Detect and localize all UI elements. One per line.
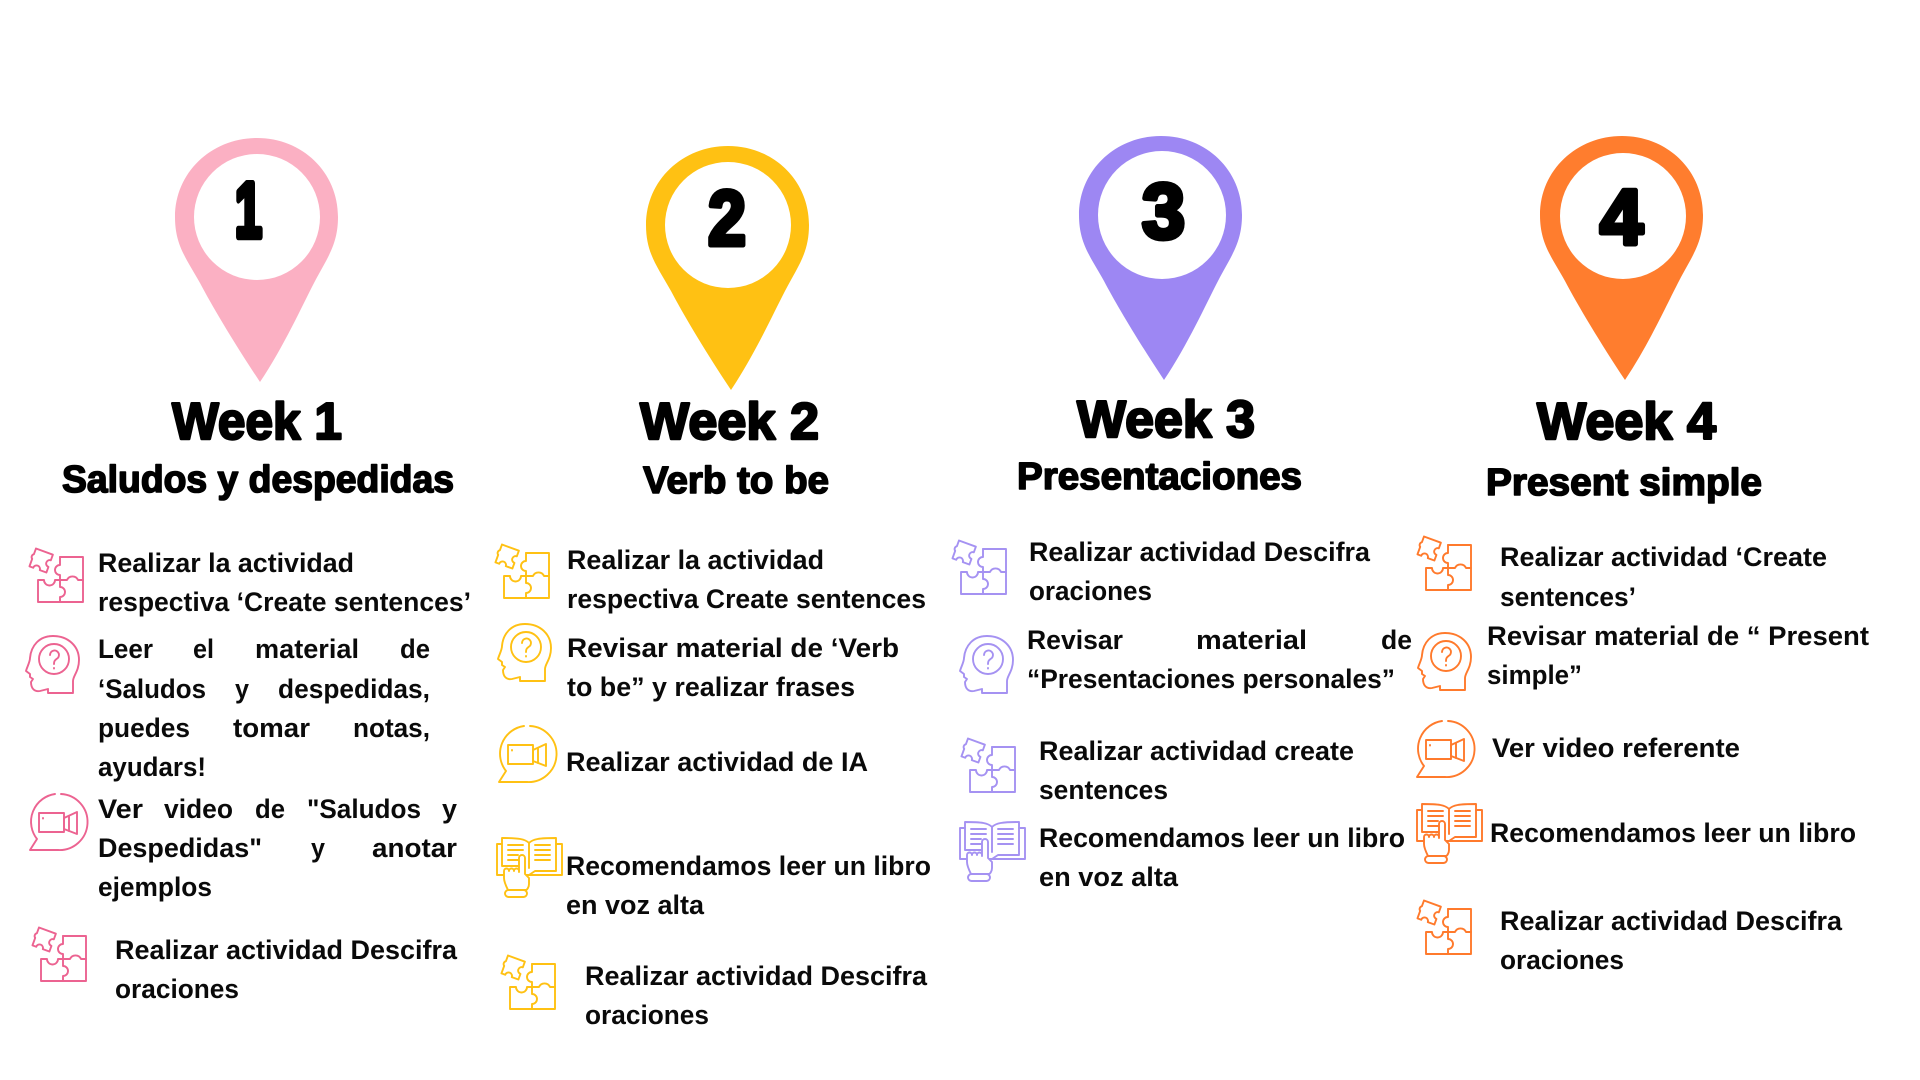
heading: week 3: Week 3 <box>1077 391 1255 449</box>
task: create sentences: respectiva ‘Create sentences’ <box>98 587 471 617</box>
task: create sentences: sentences’ <box>1500 582 1636 612</box>
task: leer el material: Leer <box>98 634 153 664</box>
task: leer un libro: Recomendamos leer un libro <box>566 851 931 881</box>
task: revisar material: Revisar <box>1027 625 1123 655</box>
panel: week 3 <box>951 136 1412 892</box>
task: actividad de IA <box>499 726 868 782</box>
pin marker 4: 4 <box>1600 173 1643 261</box>
task: create sentences: Realizar actividad ‘Create <box>1500 542 1827 572</box>
task: ver video <box>1417 721 1740 777</box>
task: ver video: ejemplos <box>98 872 212 902</box>
task: ver video <box>30 794 457 902</box>
task: descifra oraciones: oraciones <box>585 1000 709 1030</box>
task: create sentences: respectiva Create sentences <box>567 584 926 614</box>
task: ver video: y <box>442 794 457 824</box>
task: descifra oraciones: Realizar actividad Descifra <box>115 935 457 965</box>
task: create sentences: Realizar la actividad <box>567 545 824 575</box>
task: ver video: Ver video referente <box>1492 733 1740 763</box>
panel: week 4 <box>1416 136 1869 975</box>
task: leer un libro: en voz alta <box>1039 862 1178 892</box>
pin marker 3: 3 <box>1142 167 1185 255</box>
pin marker 2 <box>646 146 809 390</box>
panel: week 2 <box>494 146 931 1030</box>
subheading: verb to be: Verb to be <box>643 460 829 502</box>
task: ver video: Despedidas" <box>98 833 262 863</box>
subheading: saludos y despedidas: Saludos y despedidas <box>62 459 454 501</box>
task: revisar material: simple” <box>1487 660 1582 690</box>
subheading: present simple: Present simple <box>1486 462 1762 504</box>
task: leer el material <box>26 634 430 782</box>
task: leer un libro: Recomendamos leer un libro <box>1490 818 1856 848</box>
task: revisar material: to be” y realizar frases <box>567 672 855 702</box>
task: revisar material: “Presentaciones personales” <box>1027 664 1395 694</box>
task: leer un libro: en voz alta <box>566 890 704 920</box>
task: leer un libro <box>1417 804 1856 863</box>
task: revisar material: Revisar material de ‘Verb <box>567 633 899 663</box>
task: leer un libro: Recomendamos leer un libro <box>1039 823 1405 853</box>
task: leer el material: y <box>235 674 249 704</box>
pin marker 1 <box>175 138 338 382</box>
heading: week 1: Week 1 <box>172 393 342 451</box>
task: ver video: "Saludos <box>307 794 421 824</box>
task: descifra oraciones: Realizar actividad Descifra <box>1500 906 1842 936</box>
task: revisar material <box>1418 621 1869 690</box>
panel: week 1 <box>26 138 471 1004</box>
subheading: presentaciones: Presentaciones <box>1017 456 1302 498</box>
heading: week 4: Week 4 <box>1537 393 1716 451</box>
task: leer el material: tomar <box>233 713 310 743</box>
task: create sentences: Realizar actividad create <box>1039 736 1354 766</box>
task: revisar material: material <box>1196 625 1307 655</box>
task: ver video: Ver <box>98 794 143 824</box>
task: descifra oraciones: oraciones <box>1500 945 1624 975</box>
task: leer el material: el <box>193 634 214 664</box>
task: revisar material <box>498 624 899 702</box>
task: leer el material: ayudars! <box>98 752 206 782</box>
task: descifra oraciones: Realizar actividad Descifra <box>1029 537 1370 567</box>
task: create sentences <box>494 544 926 614</box>
task: actividad de IA: Realizar actividad de IA <box>566 747 868 777</box>
task: descifra oraciones <box>1416 900 1842 975</box>
task: revisar material: de <box>1381 625 1412 655</box>
task: descifra oraciones <box>31 927 457 1004</box>
task: leer el material: de <box>400 634 430 664</box>
pin marker 2: 2 <box>708 174 746 262</box>
task: descifra oraciones: Realizar actividad Descifra <box>585 961 927 991</box>
heading: week 2: Week 2 <box>640 393 819 451</box>
task: leer el material: despedidas, <box>278 674 430 704</box>
task: create sentences <box>28 548 471 617</box>
task: create sentences: Realizar la actividad <box>98 548 354 578</box>
task: create sentences <box>1416 536 1827 612</box>
task: descifra oraciones: oraciones <box>115 974 239 1004</box>
task: ver video: y <box>311 833 325 863</box>
task: descifra oraciones <box>951 537 1370 606</box>
task: descifra oraciones <box>500 955 927 1030</box>
task: leer el material: ‘Saludos <box>98 674 206 704</box>
pin marker 4 <box>1540 136 1703 380</box>
pin marker 3 <box>1079 136 1242 380</box>
task: leer un libro <box>960 822 1405 892</box>
task: descifra oraciones: oraciones <box>1029 576 1152 606</box>
task: ver video: video <box>164 794 233 824</box>
task: ver video: anotar <box>372 833 457 863</box>
task: revisar material: Revisar material de “ Present <box>1487 621 1869 651</box>
task: leer el material: material <box>255 634 359 664</box>
task: leer el material: puedes <box>98 713 190 743</box>
task: leer el material: notas, <box>353 713 430 743</box>
pin marker 1: 1 <box>235 166 262 254</box>
task: revisar material <box>960 625 1412 694</box>
task: leer un libro <box>497 838 931 920</box>
task: create sentences <box>960 736 1354 805</box>
task: ver video: de <box>255 794 285 824</box>
task: create sentences: sentences <box>1039 775 1168 805</box>
